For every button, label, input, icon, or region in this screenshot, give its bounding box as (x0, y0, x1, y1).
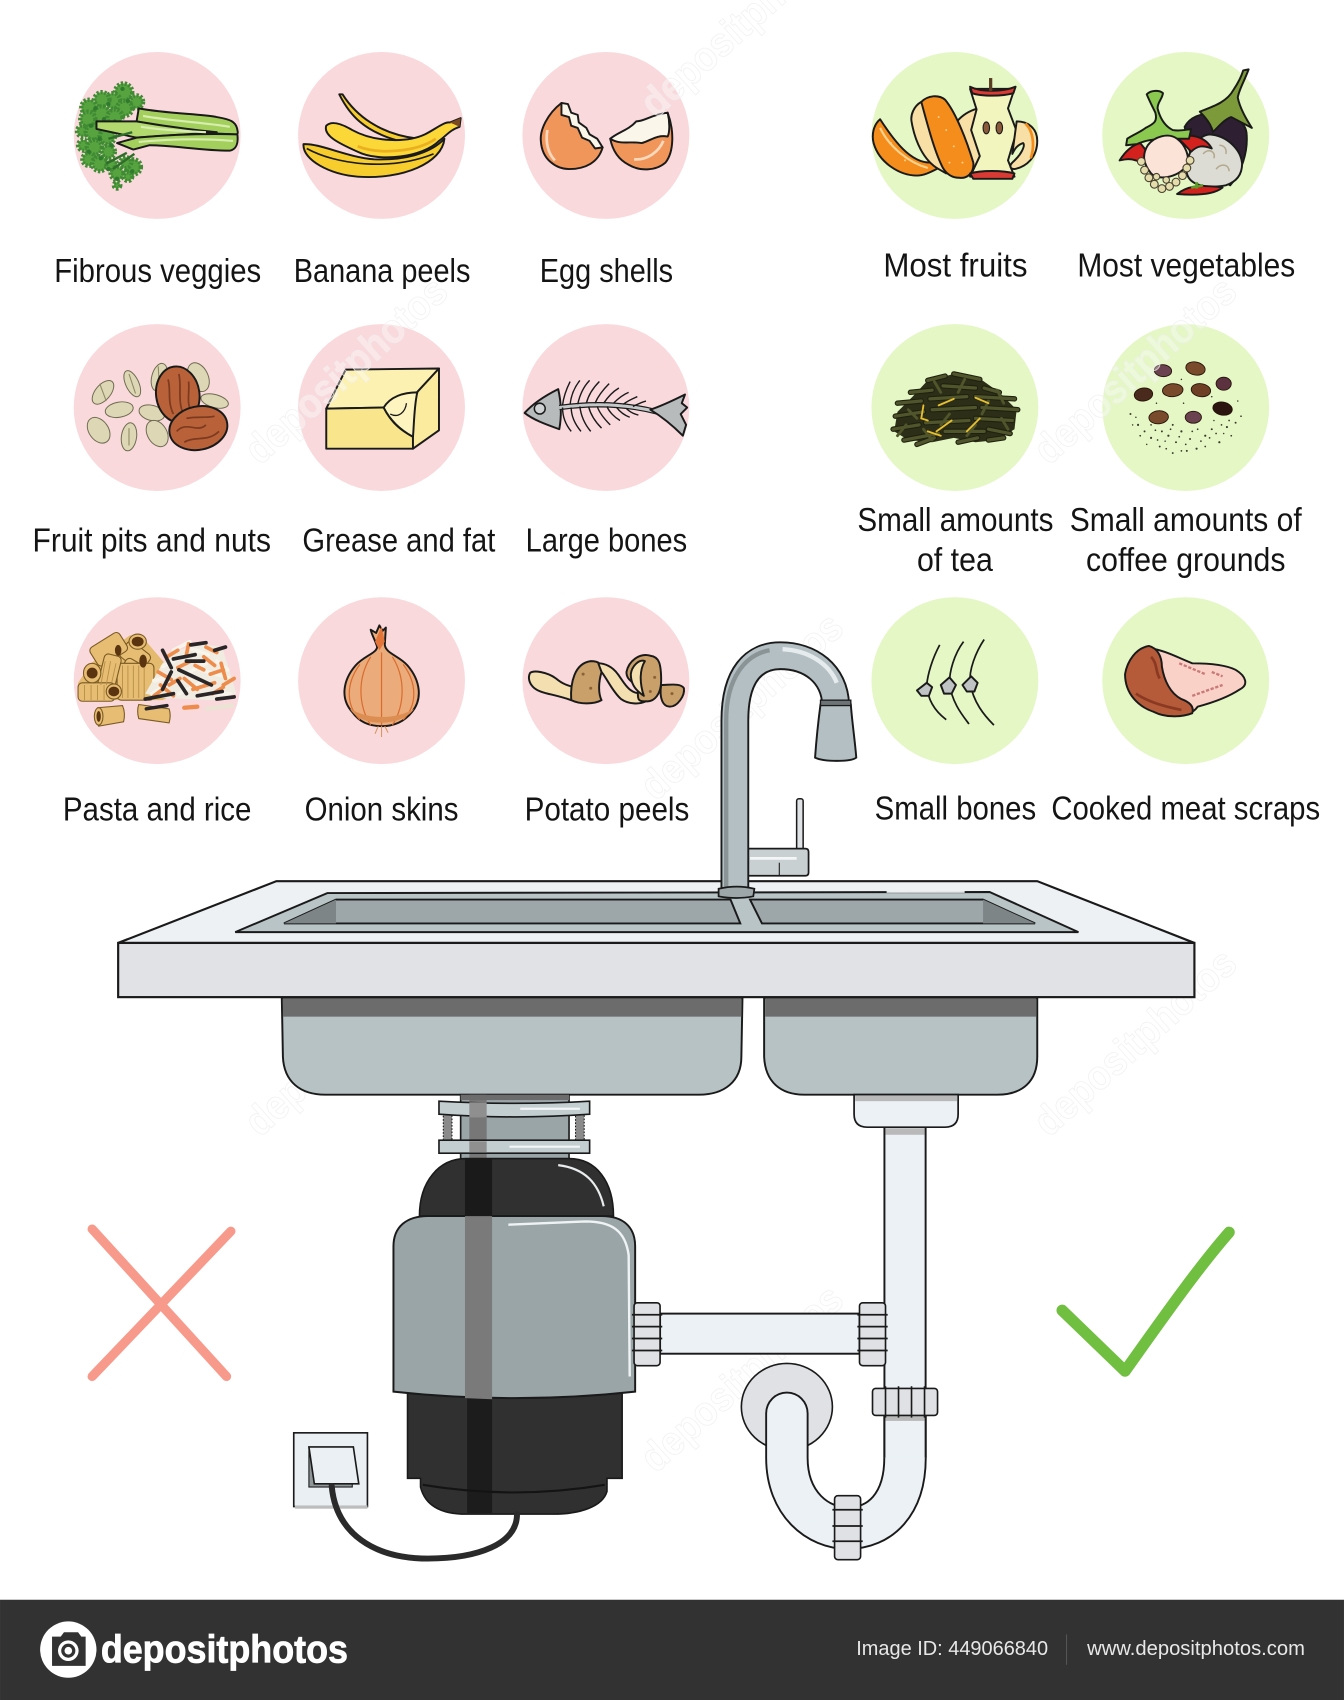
sink bowl: right, under counter (764, 998, 1037, 1095)
label (857, 502, 1054, 579)
label: of tea (917, 542, 993, 579)
power cord (332, 1486, 517, 1559)
item: most vegetables (1077, 52, 1295, 284)
item: small bones (871, 597, 1038, 827)
horizontal outlet pipe (660, 1314, 860, 1354)
item: small amounts of tea (857, 324, 1054, 579)
item: fruit pits and nuts (33, 324, 271, 560)
faint stock-photo watermarks: depositphotos (631, 603, 852, 809)
item: banana peels (294, 52, 470, 290)
icon: potato peel (529, 655, 684, 707)
sink opening (235, 892, 1078, 932)
website: www.depositphotos.com (1086, 1638, 1305, 1660)
label: Potato peels (525, 791, 689, 828)
faint stock-photo watermarks: depositphotos (235, 939, 456, 1145)
icon: green check mark, safe for disposal (1062, 1232, 1229, 1371)
faucet spout highlight (783, 649, 837, 683)
drain top cap (854, 1095, 958, 1127)
faucet spout fill (735, 656, 836, 891)
icon: rigatoni and rice (78, 631, 236, 726)
item: small amounts of coffee grounds (1070, 324, 1302, 579)
item: cooked meat scraps (1051, 597, 1320, 827)
sink bowl: left, under counter (282, 998, 742, 1095)
vertical drain pipe (884, 1127, 926, 1458)
item: large bones (522, 324, 689, 560)
label: Most fruits (883, 247, 1027, 284)
label: coffee grounds (1086, 542, 1285, 579)
item: fibrous veggies (54, 52, 261, 290)
logo wordmark: depositphotos (101, 1629, 348, 1672)
icon: coffee beans and grounds (1129, 360, 1242, 454)
faint stock-photo watermarks: depositphotos (1024, 939, 1245, 1145)
label: Fibrous veggies (54, 253, 261, 290)
disposal motor housing top (419, 1159, 613, 1216)
icon: red cross, do not put in disposal (92, 1229, 231, 1376)
faucet head (815, 700, 856, 761)
faucet spout (735, 656, 836, 891)
label: Small amounts of (1070, 502, 1302, 539)
P-trap fill (787, 1409, 905, 1528)
icon: orange peel and apple core (873, 78, 1037, 179)
disposal lower black section (408, 1393, 622, 1514)
icon: pits and nuts (83, 359, 231, 455)
disposal grey body (393, 1216, 635, 1399)
icon: cooked meat (1125, 646, 1245, 716)
icon: onion (344, 625, 419, 737)
trap wall flange (741, 1363, 832, 1450)
icon: broken egg shells (541, 103, 672, 169)
item: potato peels (522, 597, 689, 828)
label: Banana peels (294, 253, 470, 290)
item: pasta and rice (63, 597, 251, 828)
disposal mounting neck (439, 1095, 590, 1160)
item: grease and fat (298, 324, 495, 560)
item: most fruits (871, 52, 1038, 284)
label: Onion skins (305, 791, 458, 828)
item: egg shells (522, 52, 689, 290)
logo camera mark (40, 1621, 96, 1678)
faint stock-photo watermarks: depositphotos (1024, 267, 1245, 473)
label: Small bones (875, 790, 1036, 827)
faucet (719, 649, 856, 898)
panel: foods that should not go in the disposal (33, 52, 689, 828)
icon: vegetable scraps (1120, 69, 1252, 195)
label: Egg shells (540, 253, 673, 290)
pipe nut: left (632, 1303, 662, 1366)
label: Grease and fat (302, 523, 495, 560)
label (1070, 502, 1302, 579)
footer bar (0, 1600, 1344, 1700)
icon: fish skeleton (525, 380, 687, 436)
illustration: garbage disposal unit (294, 1095, 635, 1559)
P-trap outline (787, 1409, 905, 1528)
faint stock-photo watermarks (235, 0, 1245, 1481)
icon: loose tea leaves (893, 374, 1018, 444)
label: Large bones (526, 523, 687, 560)
icon: celery (77, 83, 238, 189)
label: Fruit pits and nuts (33, 523, 271, 560)
item: onion skins (298, 597, 465, 828)
faucet handle (748, 799, 809, 876)
image id: Image ID: 449066840 (856, 1638, 1048, 1660)
pipe clamp (873, 1386, 938, 1418)
faucet spout shading (726, 650, 770, 891)
icon: block of butter (326, 369, 439, 449)
faucet base (719, 887, 754, 898)
panel: foods that are fine for the disposal (857, 52, 1320, 827)
icon: small rib bones (917, 639, 994, 725)
icon: bananas (303, 94, 461, 177)
illustration: double kitchen sink with faucet (118, 649, 1194, 1095)
wall socket (294, 1433, 367, 1509)
pipe nut: right (857, 1303, 888, 1366)
trap nut (832, 1496, 863, 1560)
countertop (118, 881, 1194, 997)
faint stock-photo watermarks: depositphotos (235, 267, 456, 473)
illustration: drain pipes and trap (632, 1095, 958, 1560)
label: Pasta and rice (63, 791, 251, 828)
faint stock-photo watermarks: depositphotos (631, 1275, 852, 1481)
label: Small amounts (857, 502, 1054, 539)
label: Most vegetables (1077, 247, 1295, 284)
